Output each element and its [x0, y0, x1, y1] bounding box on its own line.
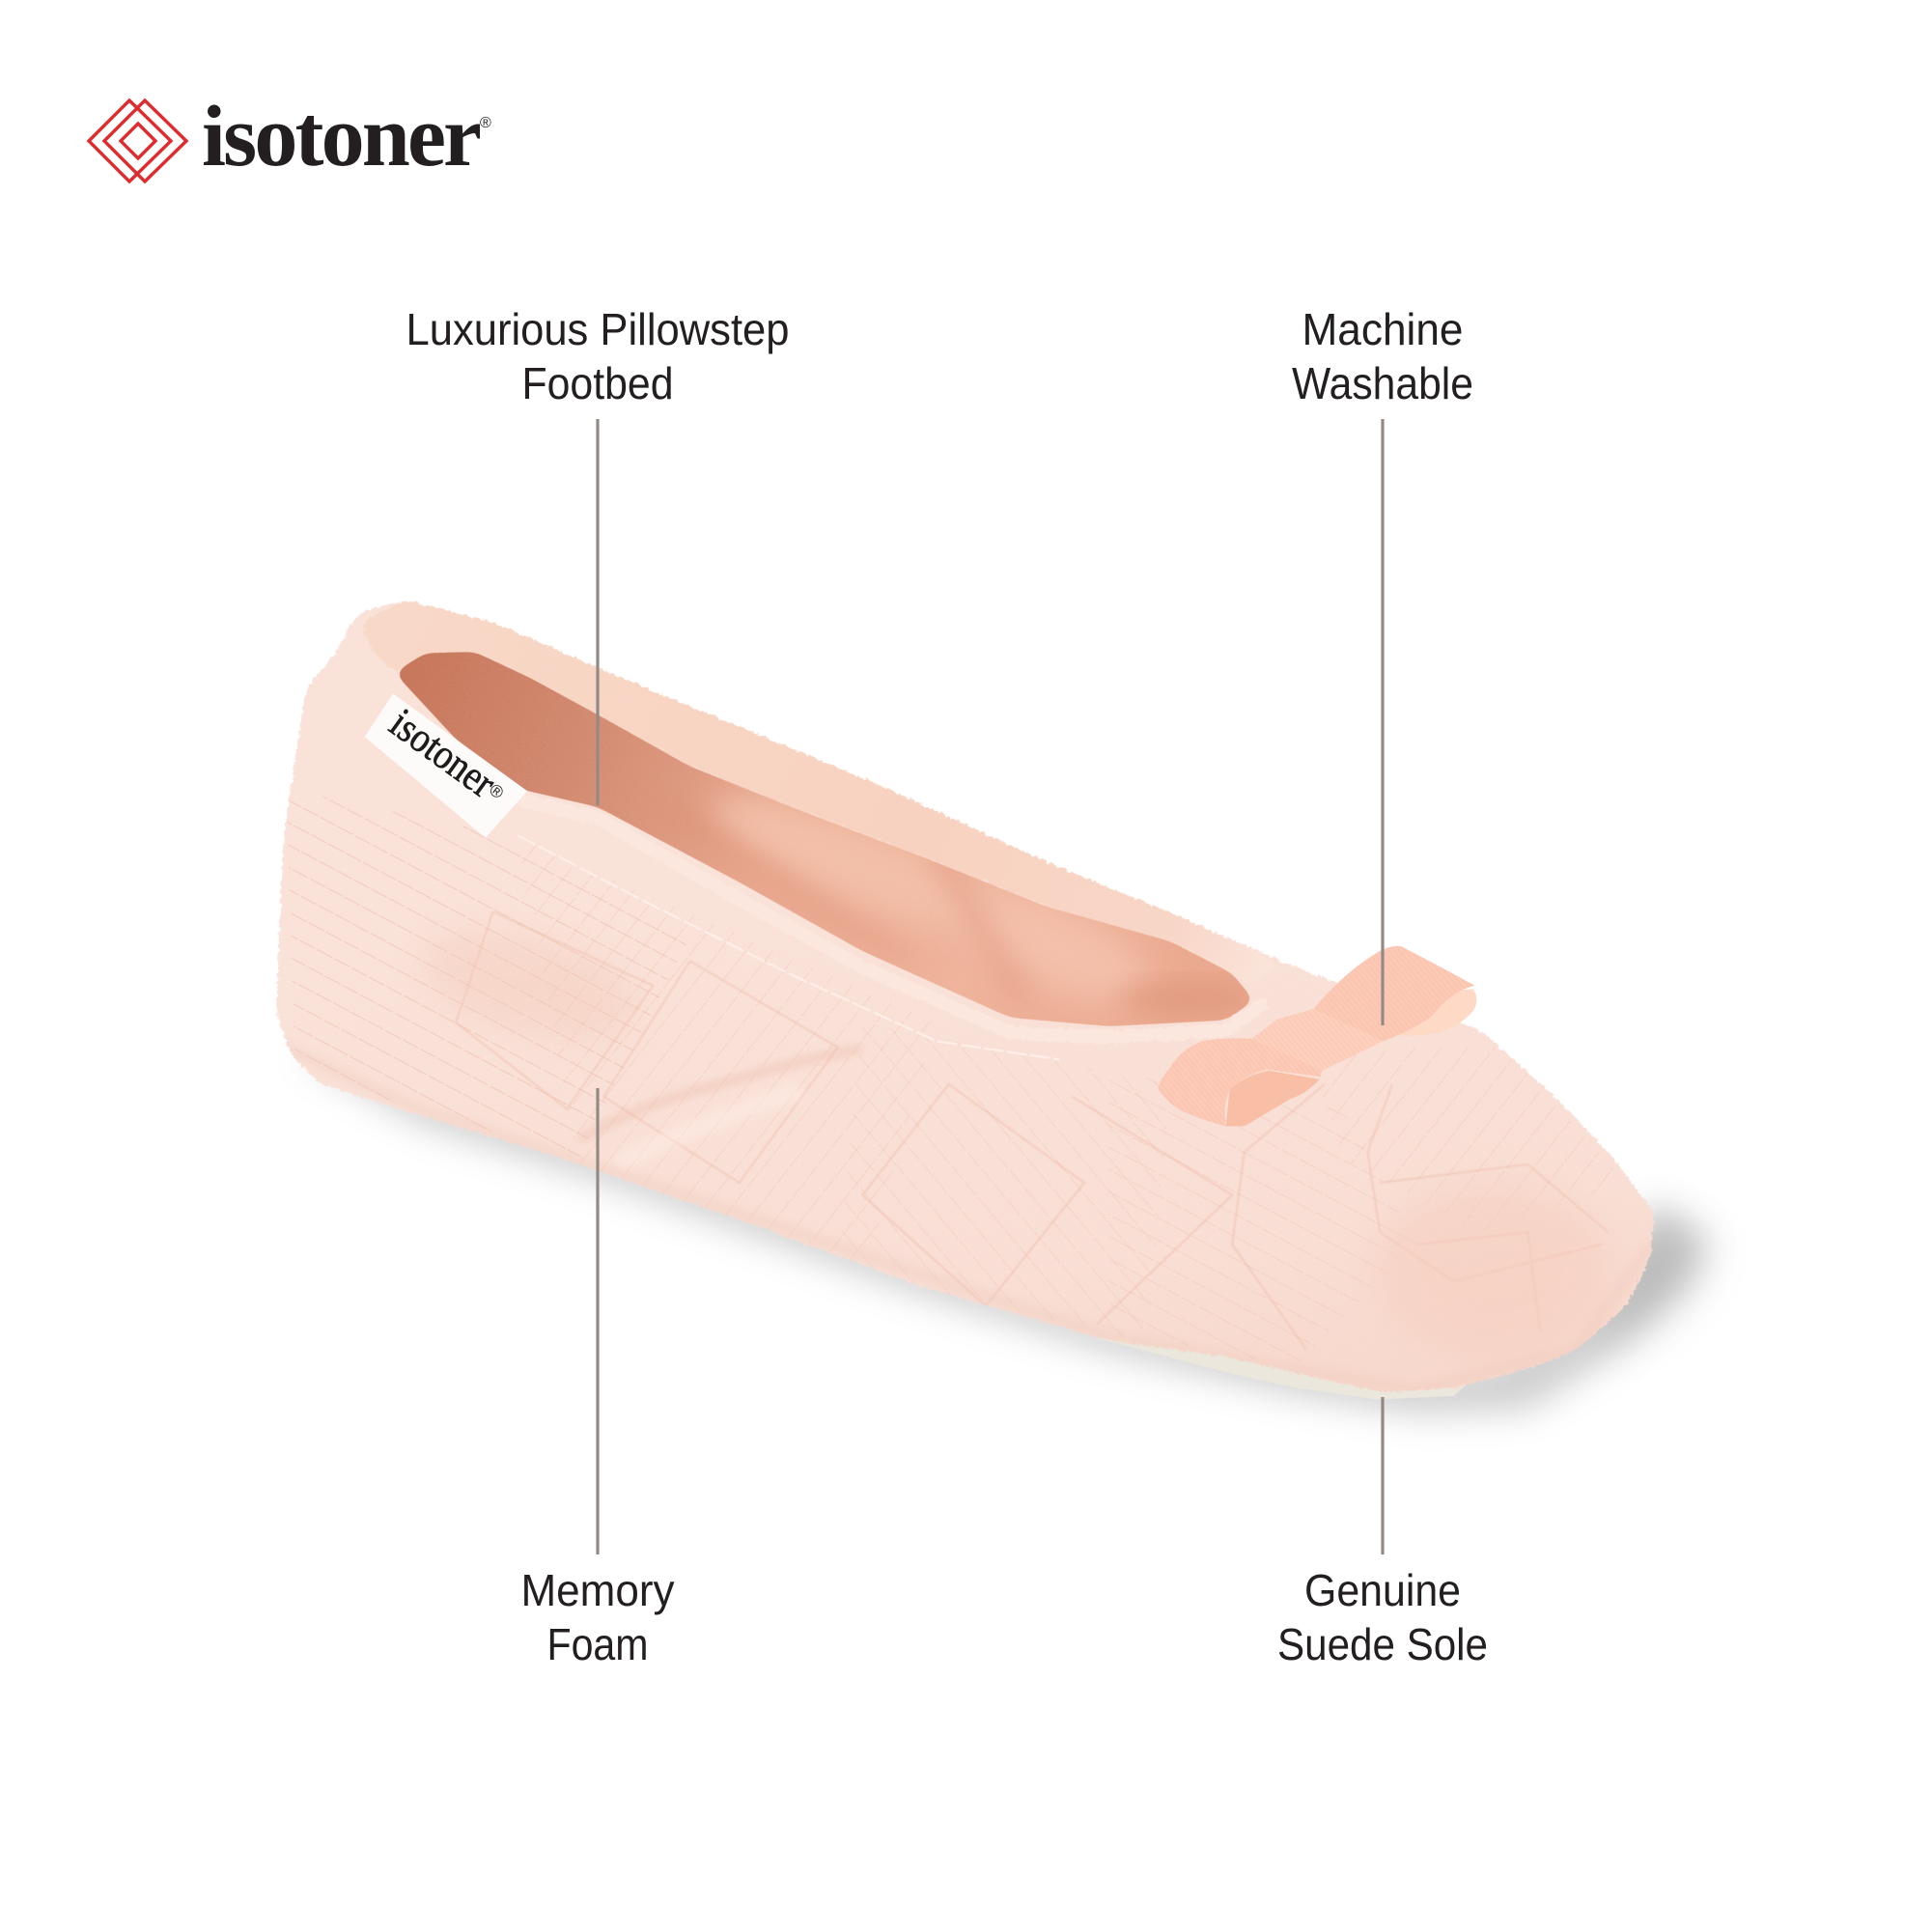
sewn label [365, 693, 527, 838]
fabric texture [246, 579, 1700, 1417]
sewn label: isotoner [381, 700, 505, 807]
label: Luxurious Pillowstep Footbed: Luxurious Pillowstep [406, 304, 790, 354]
insole opening [400, 652, 1249, 1026]
label: Machine Washable: Washable [1292, 358, 1473, 408]
leader line: footbed [596, 419, 600, 805]
logo: isotoner [89, 89, 491, 184]
leader line: suede sole [1381, 1397, 1385, 1554]
left loop band [1159, 1038, 1322, 1126]
label: Memory Foam: Memory [521, 1565, 674, 1615]
label: Machine Washable: Machine [1302, 304, 1464, 354]
slipper body [275, 601, 1655, 1392]
midfoot pink patch [431, 935, 628, 1037]
sole [1097, 1337, 1478, 1400]
woven hatch: midfoot [518, 838, 937, 1281]
wordmark: isotoner [202, 89, 482, 184]
registered mark: ® [480, 115, 491, 131]
slipper product illustration [222, 554, 1725, 1442]
label: Memory Foam: Foam [546, 1619, 649, 1669]
woven hatch: heel [286, 789, 690, 1159]
right loop band [1313, 946, 1474, 1041]
label: Luxurious Pillowstep Footbed: Footbed [521, 358, 674, 408]
ground shadow [295, 1053, 1713, 1414]
woven hatch: toe [1323, 1047, 1613, 1225]
front rim of opening [523, 800, 1262, 1037]
knot [1252, 1009, 1384, 1071]
diamond stitching [456, 911, 1608, 1349]
leader line: machine washable [1381, 419, 1385, 1025]
bow [1159, 946, 1476, 1126]
stitched seam [518, 835, 1059, 1059]
crease [579, 1049, 862, 1139]
collar lining [360, 600, 1281, 986]
label: Genuine Suede Sole: Genuine [1304, 1565, 1461, 1615]
leader line: memory foam [596, 1088, 600, 1554]
right loop underside [1392, 990, 1476, 1036]
toe pink tint [1383, 1188, 1596, 1340]
sewn label: ® [486, 780, 507, 803]
label: Genuine Suede Sole: Suede Sole [1277, 1619, 1488, 1669]
icon: red diamond mark [89, 100, 186, 182]
left loop underside [1226, 1071, 1320, 1126]
